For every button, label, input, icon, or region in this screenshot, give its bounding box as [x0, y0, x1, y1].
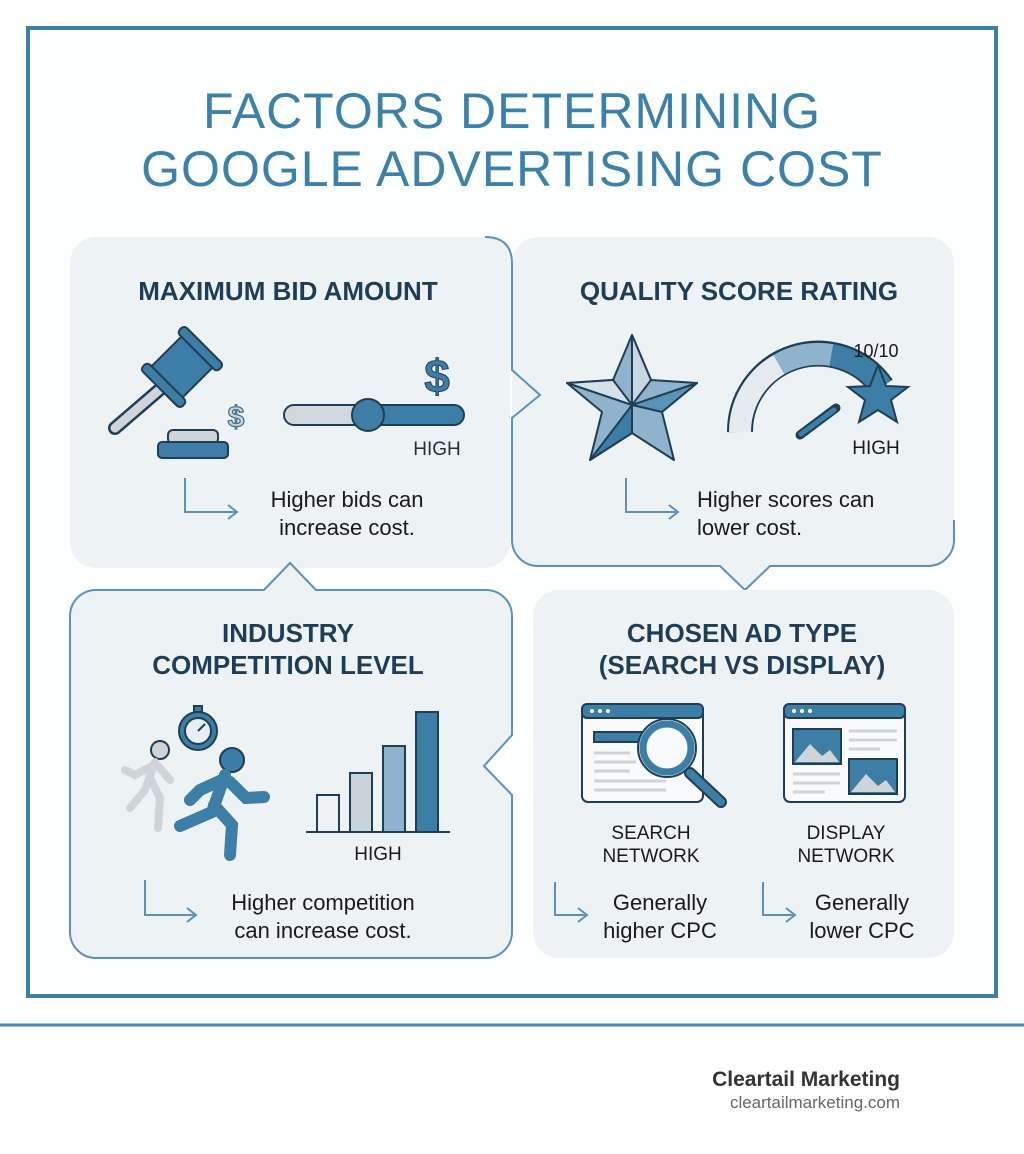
panel: quality score rating: [485, 237, 954, 590]
heading: INDUSTRY: [222, 618, 354, 648]
text: Higher scores can: [697, 487, 874, 512]
text: Higher competition: [231, 890, 415, 915]
icon: gauge: 10/10: [853, 341, 899, 361]
panel: quality score rating: lower cost.: [697, 515, 802, 540]
panel: maximum bid amount: increase cost.: [279, 515, 415, 540]
title: GOOGLE ADVERTISING COST: [141, 141, 883, 197]
heading: QUALITY SCORE RATING: [580, 276, 898, 306]
panel: chosen ad type: NETWORK: [797, 846, 895, 867]
heading: CHOSEN AD TYPE: [627, 618, 857, 648]
panel: industry competition level: HIGH: [354, 844, 402, 865]
arrow: [145, 880, 196, 922]
icon: runners with stopwatch: [125, 706, 264, 855]
bar chart: [306, 712, 450, 832]
panel: chosen ad type: DISPLAY: [807, 823, 886, 844]
arrow: [626, 478, 678, 519]
arrows: [555, 882, 795, 922]
text: Generally: [613, 890, 707, 915]
panel: chosen ad type: NETWORK: [602, 846, 700, 867]
icon: display browser: [784, 704, 905, 802]
heading: MAXIMUM BID AMOUNT: [138, 276, 438, 306]
panel: chosen ad type: Generally: [815, 890, 909, 915]
icon: gavel: [115, 325, 228, 458]
icon: slider: HIGH: [413, 439, 461, 460]
panel: chosen ad type: lower CPC: [809, 918, 915, 943]
panel: maximum bid amount: $: [228, 401, 245, 434]
icon: search browser: [582, 704, 721, 802]
footer brand: Cleartail Marketing: [712, 1068, 900, 1091]
icon: slider: [284, 350, 464, 460]
panel: chosen ad type: [533, 590, 954, 958]
icon: slider: $: [424, 350, 450, 402]
panel: chosen ad type: SEARCH: [611, 823, 691, 844]
panel: chosen ad type: higher CPC: [603, 918, 717, 943]
panel: industry competition level: [70, 563, 512, 958]
panel: industry competition level: COMPETITION LEVEL: [152, 650, 424, 680]
panel: chosen ad type: (SEARCH VS DISPLAY): [599, 650, 885, 680]
arrow: [185, 478, 237, 519]
panel: maximum bid amount: [70, 237, 510, 568]
icon: star: [567, 335, 697, 460]
title: [141, 83, 883, 197]
icon: gauge: HIGH: [852, 438, 900, 459]
footer brand: [712, 1068, 900, 1112]
footer brand: cleartailmarketing.com: [730, 1093, 900, 1112]
frame: [28, 28, 996, 996]
text: Higher bids can: [271, 487, 423, 512]
title: FACTORS DETERMINING: [203, 83, 821, 139]
panel: industry competition level: can increase cost.: [234, 918, 412, 943]
icon: gauge: [740, 341, 908, 459]
